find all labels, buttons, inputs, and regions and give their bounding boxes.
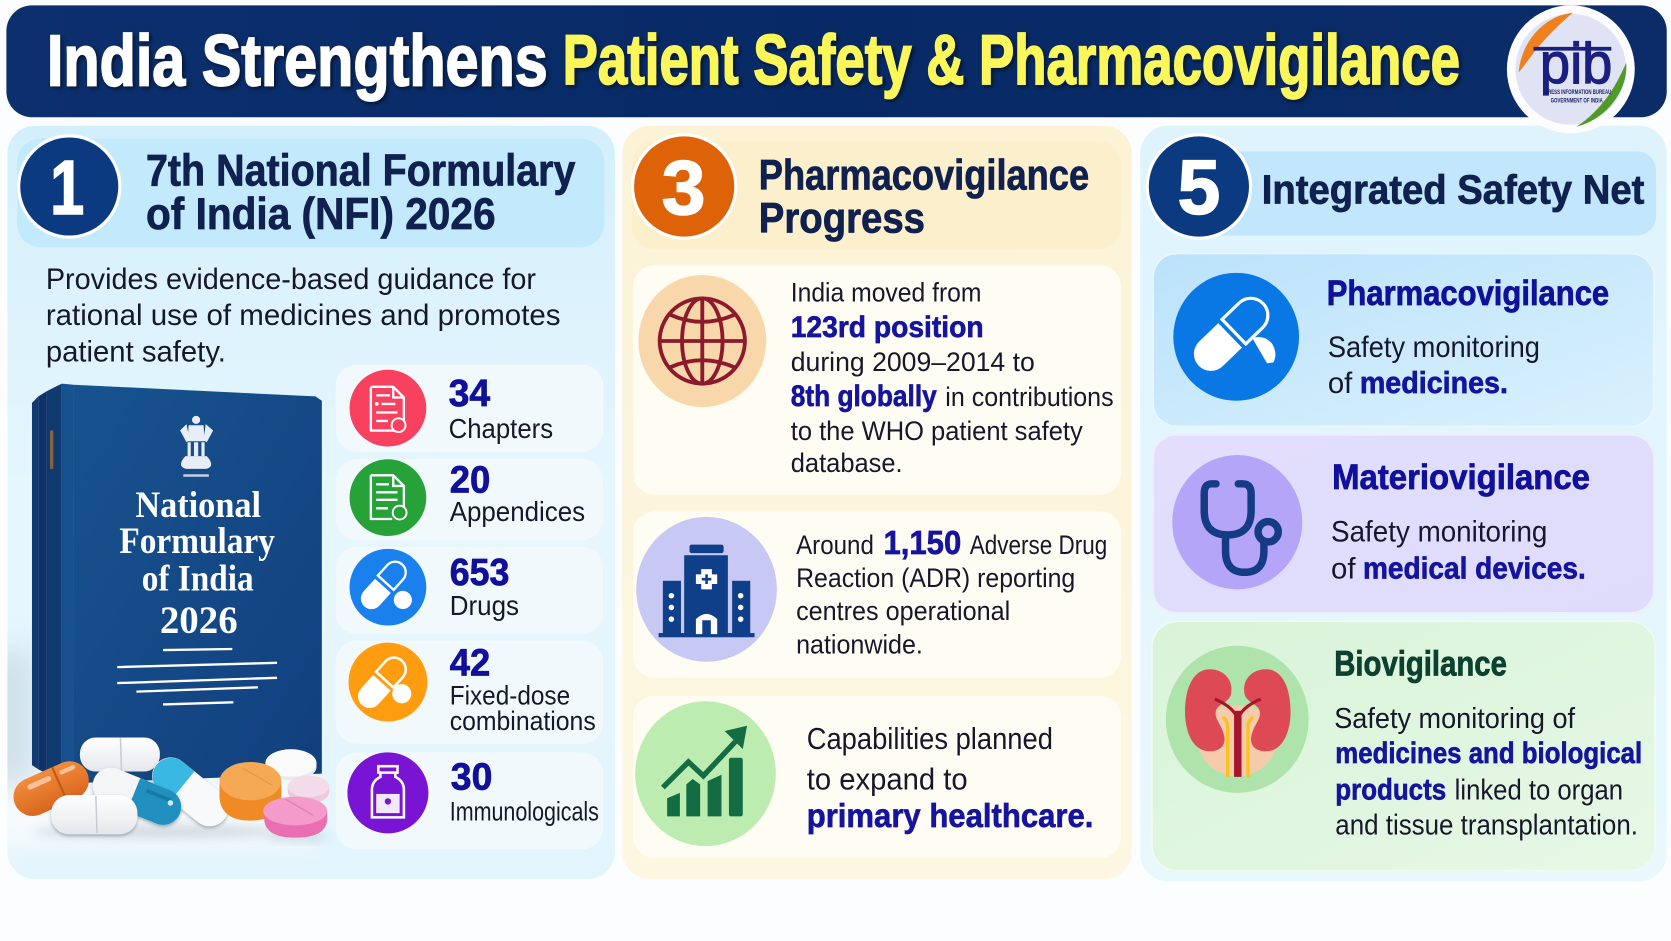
PIB logo: pib (1540, 32, 1612, 96)
card: primary healthcare: primary healthcare. (807, 797, 1093, 834)
stat: 20 appendices: 20 (450, 458, 490, 501)
card: WHO ranking: 123rd position (791, 311, 984, 344)
icon: globe (638, 275, 766, 407)
card: Pharmacovigilance: of (1328, 367, 1353, 400)
card: primary healthcare: to expand to (807, 762, 968, 797)
icon: stethoscope (1172, 455, 1302, 589)
card: Biovigilance: Safety monitoring of (1334, 703, 1576, 735)
stat: 34 chapters (336, 364, 603, 452)
panel: Pharmacovigilance Progress (622, 126, 1132, 879)
heading: section 3 (631, 133, 1121, 249)
description: rational use of medicines and promotes (46, 299, 561, 332)
stat: 30 immunologicals (336, 752, 603, 849)
stat: 20 appendices: Appendices (450, 496, 585, 527)
pink tablet (263, 797, 327, 838)
card: ADR centres: Around (796, 530, 874, 560)
card: ADR centres: 1,150 (883, 524, 961, 561)
stat: 42 fixed-dose combinations: Fixed-dose (450, 680, 570, 710)
white and teal capsule (87, 762, 187, 830)
heading: section 3: Pharmacovigilance (759, 152, 1089, 200)
header banner (6, 5, 1667, 117)
heading: section 5 (1146, 133, 1656, 240)
heading: section 1: of India (NFI) 2026 (146, 189, 496, 239)
card: ADR centres: centres operational (796, 596, 1010, 626)
card: Biovigilance: and tissue transplantation. (1335, 809, 1638, 841)
stat: 42 fixed-dose combinations: 42 (450, 642, 490, 685)
card: WHO ranking: 8th globally (791, 380, 937, 413)
card: Materiovigilance: Safety monitoring (1331, 515, 1547, 548)
tabletop floor (0, 650, 314, 847)
icon: hospital (636, 517, 777, 662)
card: primary healthcare: Capabilities planned (807, 721, 1053, 756)
small white tablet (265, 749, 317, 780)
card: Materiovigilance: Materiovigilance (1332, 458, 1590, 497)
stat: 20 appendices (336, 458, 603, 540)
card: Biovigilance: products (1335, 773, 1446, 806)
heading: section 1: 7th National Formulary (146, 145, 576, 195)
stat: 30 immunologicals: Immunologicals (450, 797, 599, 827)
book illustration: National (135, 485, 261, 526)
description: patient safety. (46, 335, 226, 368)
blue and white capsule (144, 750, 236, 834)
pills (7, 737, 329, 841)
card: Materiovigilance: of (1331, 553, 1356, 586)
book illustration (32, 384, 322, 783)
card: WHO ranking (633, 265, 1121, 494)
book illustration: 2026 (160, 598, 238, 642)
stat: 653 drugs: Drugs (450, 590, 519, 621)
title: India Strengthens (47, 20, 548, 101)
card: Materiovigilance (1153, 435, 1654, 613)
card: ADR centres: Adverse Drug (970, 530, 1107, 560)
card: WHO ranking: during 2009–2014 to (791, 347, 1035, 377)
card: Materiovigilance: medical devices. (1363, 551, 1586, 586)
panel: National Formulary of India (0, 126, 615, 879)
white capsule, back (80, 737, 160, 772)
white tablet (51, 795, 137, 834)
card: primary healthcare (633, 696, 1121, 858)
PIB logo (1507, 5, 1635, 133)
card: WHO ranking: to the WHO patient safety (791, 416, 1083, 446)
stat: 42 fixed-dose combinations: combinations (450, 706, 596, 736)
card: Biovigilance: linked to organ (1455, 774, 1623, 806)
icon: capsule (1173, 273, 1299, 401)
icon: kidneys (1166, 646, 1309, 793)
card: ADR centres: nationwide. (796, 629, 923, 659)
stat: 34 chapters: Chapters (449, 413, 553, 444)
orange capsule (7, 755, 95, 822)
card: Pharmacovigilance: medicines. (1360, 365, 1508, 400)
heading: section 1 (17, 134, 604, 247)
heading: section 5: 5 (1178, 146, 1220, 231)
heading: section 5: Integrated Safety Net (1262, 167, 1644, 213)
card: Biovigilance: Biovigilance (1334, 645, 1507, 684)
PIB logo: PRESS INFORMATION BUREAU (1545, 89, 1612, 96)
panel: Integrated Safety Net (1140, 126, 1667, 881)
emblem (180, 416, 213, 477)
stat: 653 drugs (336, 547, 603, 634)
heading: section 3: 3 (662, 146, 705, 231)
book illustration: Formulary (119, 521, 275, 562)
stat: 653 drugs: 653 (450, 551, 509, 594)
book illustration: of India (142, 558, 254, 599)
heading: section 1: 1 (50, 146, 84, 231)
card: Pharmacovigilance: Pharmacovigilance (1327, 274, 1609, 313)
card: ADR centres: Reaction (ADR) reporting (796, 563, 1075, 593)
stat: 42 fixed-dose combinations (336, 640, 603, 744)
card: WHO ranking: in contributions (945, 382, 1114, 412)
icon: growth chart (635, 701, 776, 846)
PIB logo: GOVERNMENT OF INDIA (1551, 97, 1603, 104)
stat: 30 immunologicals: 30 (451, 756, 492, 799)
description: Provides evidence-based guidance for (46, 263, 536, 296)
card: Pharmacovigilance (1153, 254, 1654, 426)
orange tablet (220, 762, 281, 821)
card: Biovigilance (1152, 621, 1655, 871)
card: Pharmacovigilance: Safety monitoring (1328, 331, 1540, 364)
pale pink tablet (288, 776, 329, 804)
heading: section 3: Progress (759, 194, 925, 242)
card: ADR centres (633, 512, 1121, 678)
card: WHO ranking: database. (791, 448, 903, 478)
description (46, 263, 561, 368)
card: WHO ranking: India moved from (791, 278, 981, 308)
title (47, 20, 1460, 101)
stat: 34 chapters: 34 (449, 372, 491, 415)
